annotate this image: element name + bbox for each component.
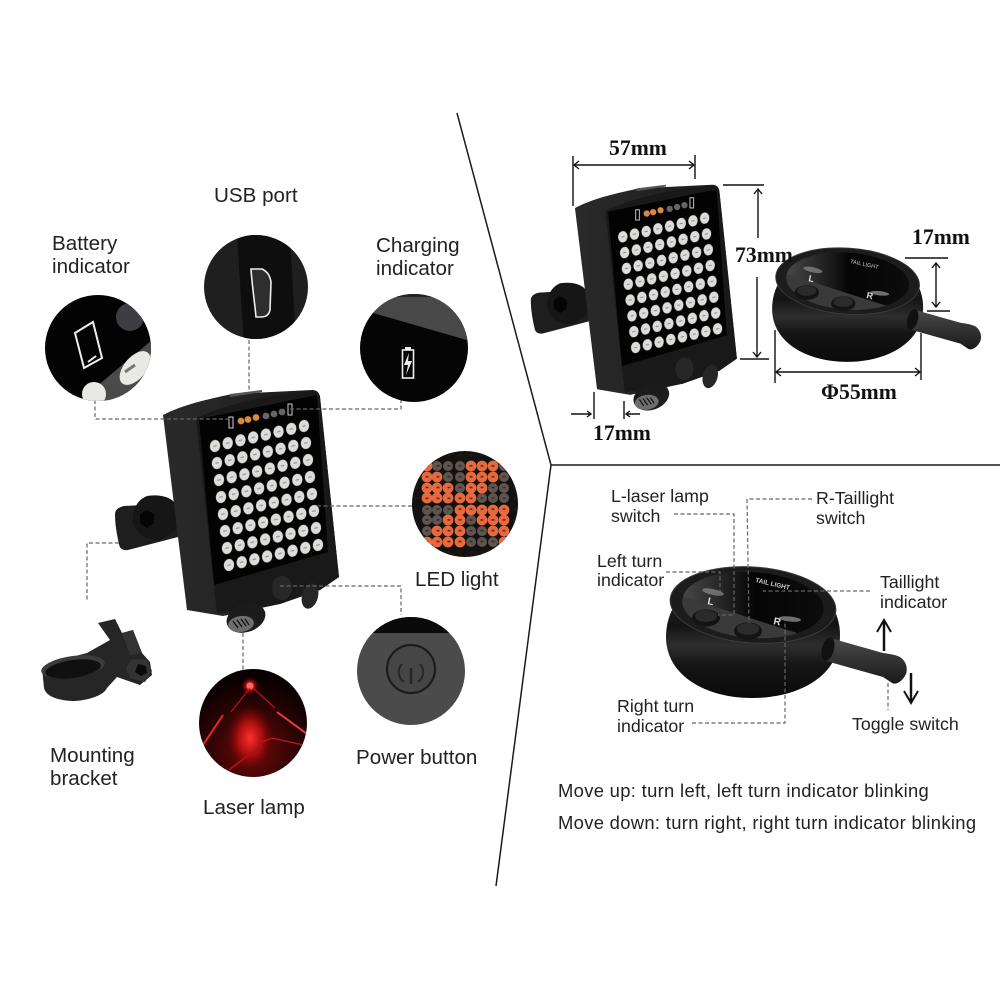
arrow: toggle down (904, 673, 918, 703)
dimension: height 17mm (controller) (905, 225, 970, 311)
label: Left turn indicator: indicator (597, 570, 664, 590)
controller printed marks, labelled view (706, 577, 790, 629)
icon circle: laser lamp detail (199, 669, 307, 777)
icon circle: battery indicator detail (45, 295, 151, 401)
dimension: height 73mm (723, 185, 793, 359)
label: Toggle switch: Toggle switch (852, 714, 959, 734)
label: Laser lamp: Laser lamp (203, 796, 305, 819)
label: Taillight indicator: indicator (880, 592, 947, 612)
leader lines: controller callouts (666, 499, 888, 723)
round controller, labelled switches (666, 560, 907, 698)
label: Mounting bracket: bracket (50, 767, 118, 790)
small product with dimensions (531, 185, 737, 415)
controller printed marks, labelled view: R (772, 616, 782, 629)
dimension: depth 17mm (lamp): 17mm (593, 421, 651, 445)
label: Battery indicator: Battery (52, 232, 118, 255)
label: USB port: USB port (214, 184, 298, 207)
instruction: move up: Move up: turn left, left turn indicator blinking (558, 780, 929, 801)
controller printed marks, dimension view: TAIL LIGHT (850, 259, 880, 271)
icon circle: charging indicator detail (360, 294, 468, 402)
leader lines: main product callouts (87, 340, 412, 670)
controller printed marks, labelled view: L (706, 596, 715, 608)
icon: mounting bracket (40, 619, 152, 701)
label: Charging indicator: indicator (376, 257, 454, 280)
dimension: depth 17mm (lamp) (571, 392, 651, 445)
dimension: height 73mm: 73mm (735, 243, 793, 267)
label: L-laser lamp switch: L-laser lamp (611, 486, 709, 506)
controller printed marks, dimension view: L (808, 273, 816, 284)
label: Taillight indicator: Taillight (880, 572, 939, 592)
dimension: diameter 55mm (775, 330, 921, 404)
label: Left turn indicator: Left turn (597, 551, 662, 571)
dimension: diameter 55mm: Φ55mm (821, 380, 897, 404)
dimension: height 17mm (controller): 17mm (912, 225, 970, 249)
label: Charging indicator: Charging (376, 234, 460, 257)
arrow: toggle up (877, 620, 891, 651)
round controller with dimensions (772, 242, 981, 362)
dimension: width 57mm (573, 136, 695, 206)
divider: angled panel separator (457, 113, 1000, 886)
icon circle: LED light matrix detail (410, 450, 520, 560)
label: LED light: LED light (415, 568, 499, 591)
dimension: width 57mm: 57mm (609, 136, 667, 160)
label: Right turn indicator: Right turn (617, 696, 694, 716)
main tail light product (115, 390, 339, 638)
controller printed marks, labelled view: TAIL LIGHT (755, 577, 790, 592)
controller printed marks, dimension view (808, 259, 880, 301)
label: L-laser lamp switch: switch (611, 506, 660, 526)
instruction: move down: Move down: turn right, right turn indicator blinking (558, 812, 976, 833)
icon circle: USB port detail (204, 235, 308, 339)
label: Power button: Power button (356, 746, 477, 769)
label: Mounting bracket: Mounting (50, 744, 135, 767)
label: Battery indicator: indicator (52, 255, 130, 278)
label: R-Taillight switch: R-Taillight (816, 488, 894, 508)
label: Right turn indicator: indicator (617, 716, 684, 736)
icon circle: power button detail (357, 617, 465, 725)
label: R-Taillight switch: switch (816, 508, 865, 528)
controller printed marks, dimension view: R (866, 290, 875, 301)
